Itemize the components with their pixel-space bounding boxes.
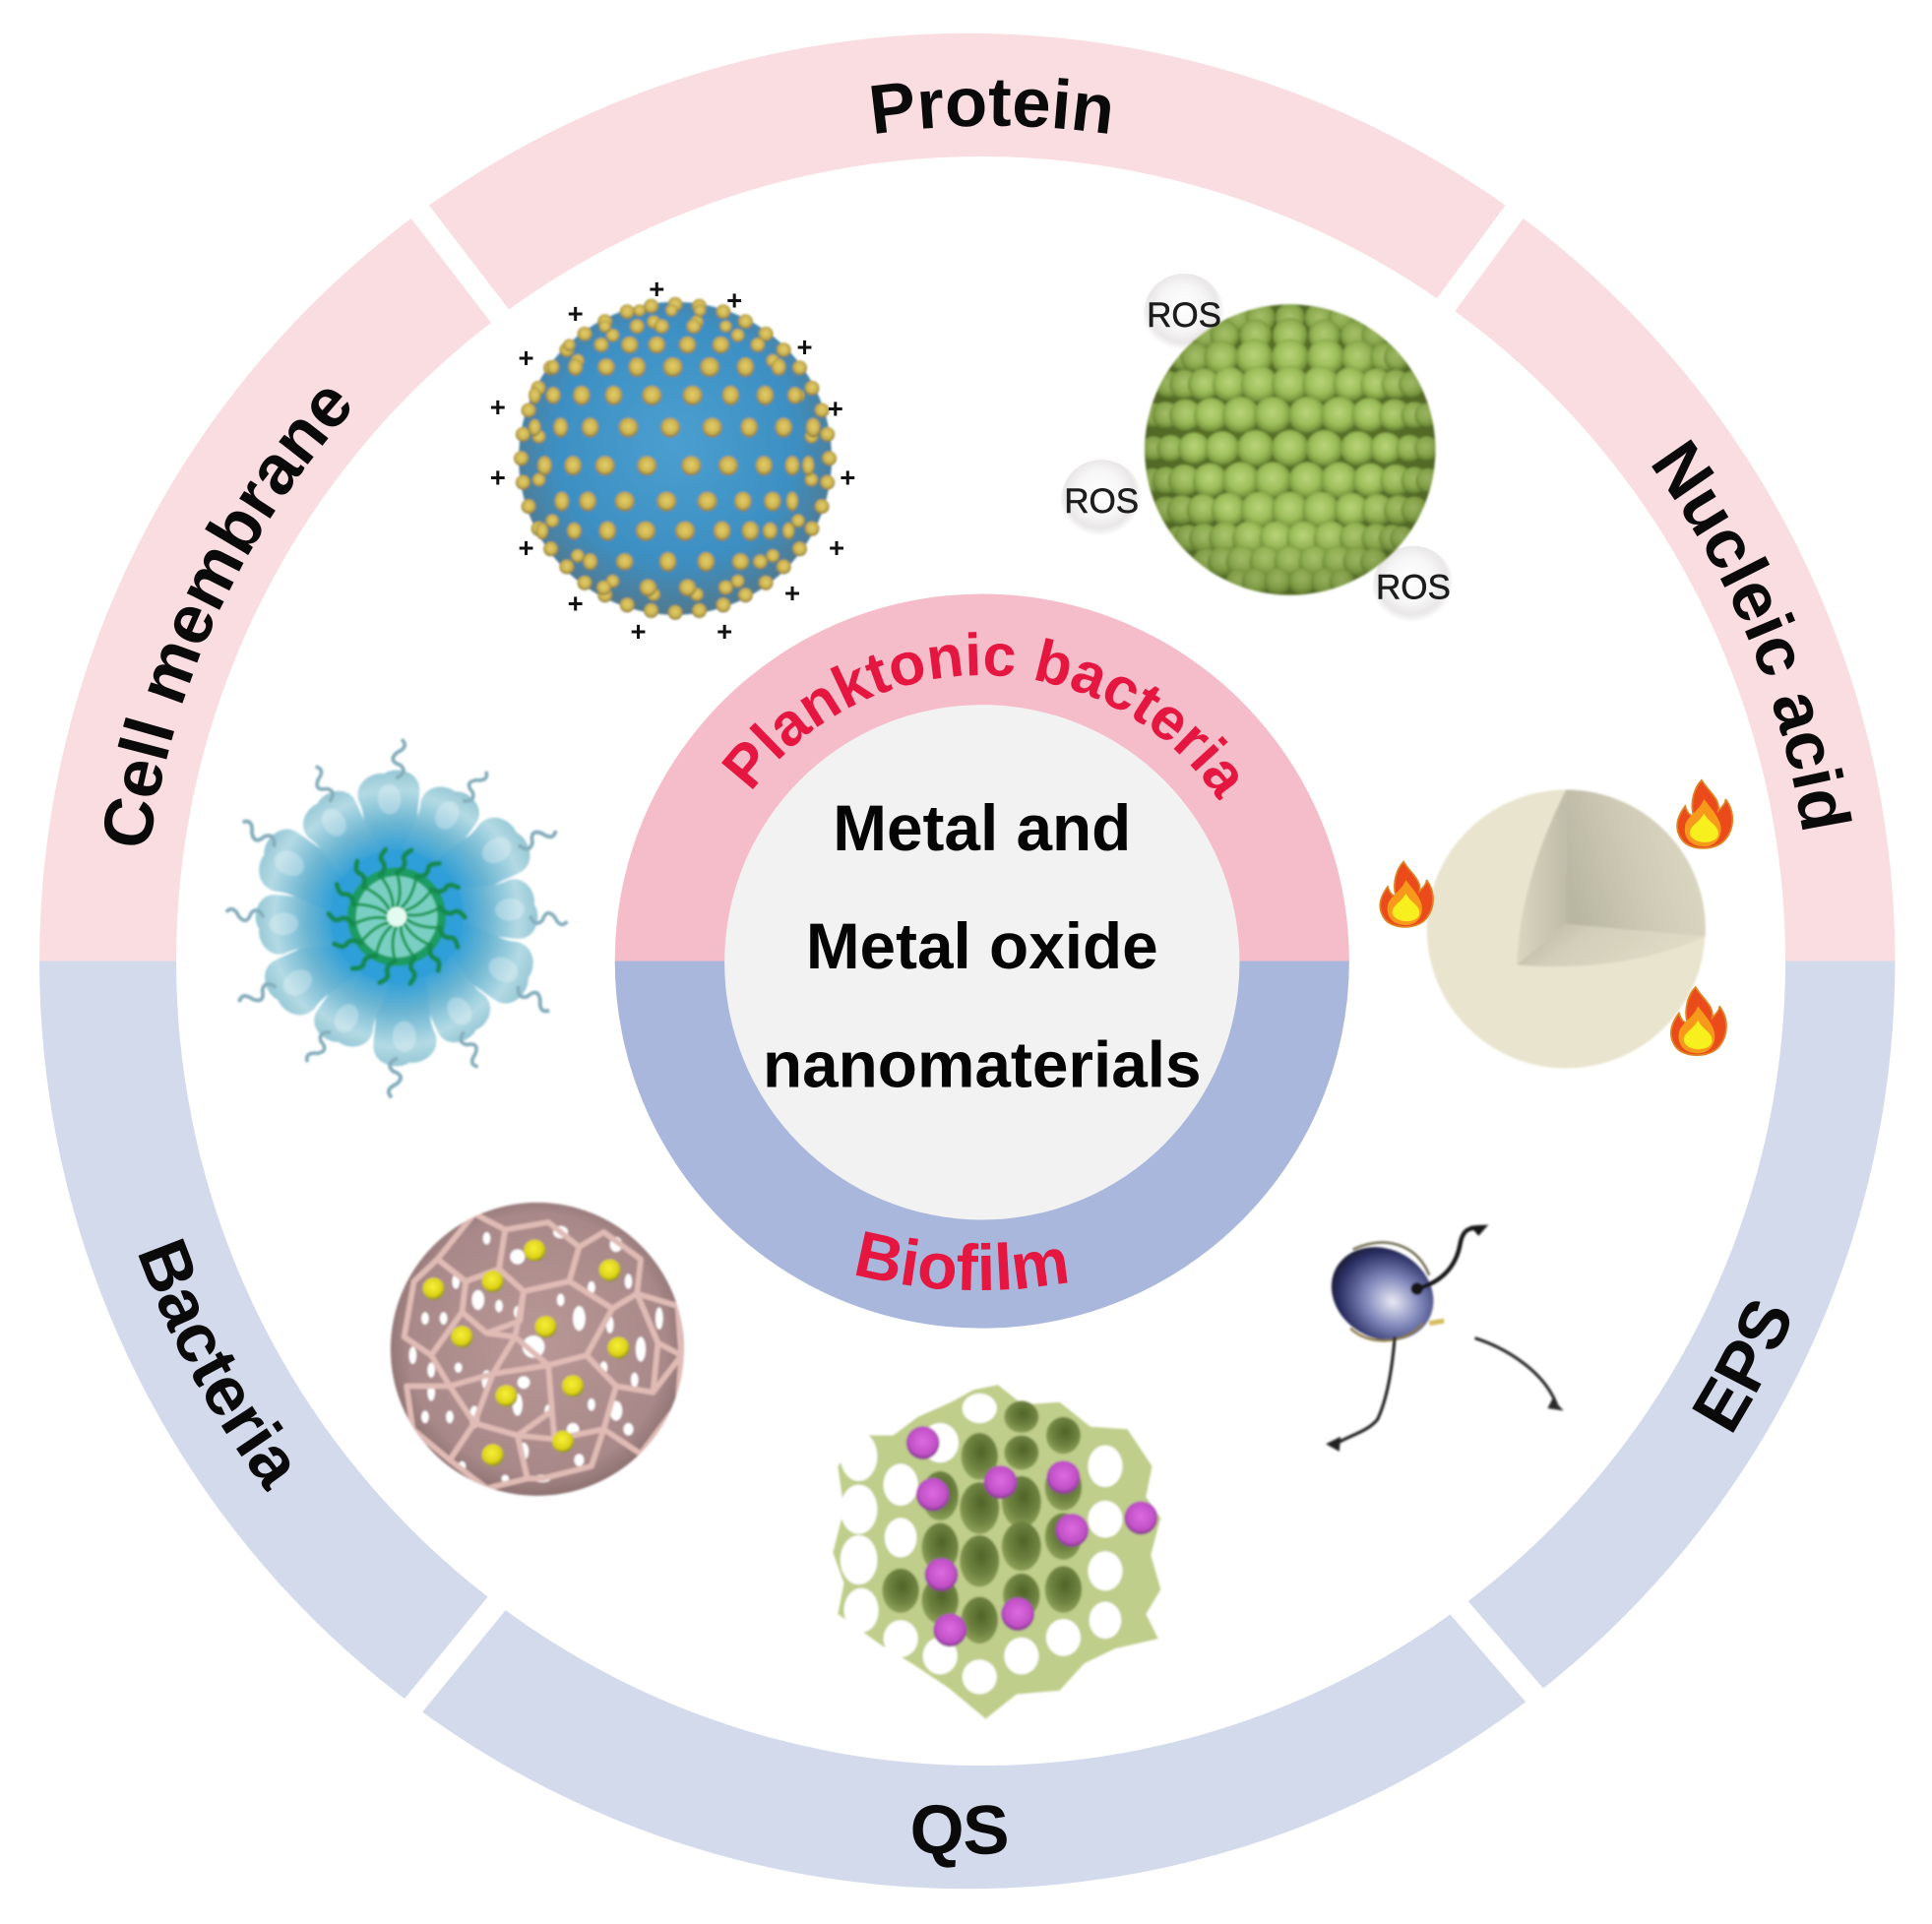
- icon: flame upper right: [1677, 780, 1732, 848]
- icon: blue sphere with gold dots: [514, 297, 837, 620]
- icon: cream hollow core-shell sphere: [1427, 790, 1706, 1068]
- icon: plus charges around blue sphere: +: [796, 332, 813, 362]
- label: Cell membrane: Cell membrane: [104, 390, 350, 845]
- icon: plus charges around blue sphere: +: [784, 578, 800, 608]
- icon: flame left: [1380, 862, 1433, 927]
- label: ROS left: ROS: [1064, 482, 1139, 521]
- icon: ROS bubble halos: [1061, 274, 1454, 627]
- centre title: nanomaterials: [763, 1028, 1202, 1100]
- label: EPS: EPS: [1692, 1301, 1789, 1433]
- label: Nucleic acid: Nucleic acid: [1652, 439, 1852, 831]
- label: Protein: Protein: [871, 78, 1110, 134]
- hub label: Biofilm: Biofilm: [856, 1231, 1067, 1290]
- icon: plus charges around blue sphere: +: [726, 284, 742, 315]
- icon: green nanoparticle cluster: [1140, 303, 1440, 595]
- icon: flame lower right: [1671, 987, 1726, 1055]
- icon: plus charges around blue sphere: +: [568, 588, 584, 618]
- hub label: Planktonic bacteria: Planktonic bacteria: [721, 632, 1238, 801]
- central hub ring: [615, 593, 1349, 1329]
- label: ROS bottom right: ROS: [1376, 568, 1451, 606]
- icon: micelle with blue petals: [221, 738, 571, 1098]
- centre title: Metal oxide: [806, 910, 1158, 982]
- icon: plus charges around blue sphere: +: [490, 463, 506, 493]
- label: Bacteria: Bacteria: [138, 1238, 289, 1492]
- icon: plus charges around blue sphere: +: [630, 616, 647, 647]
- icon: plus charges around blue sphere: +: [568, 298, 584, 329]
- icon: plus charges around blue sphere: [490, 274, 855, 647]
- icon: plus charges around blue sphere: +: [519, 342, 534, 373]
- label: QS: QS: [913, 1805, 1007, 1868]
- icon: pink fullerene cage with yellow balls: [391, 1203, 684, 1496]
- label: ROS top: ROS: [1147, 296, 1221, 335]
- icon: green porous lattice with purple balls: [833, 1385, 1160, 1718]
- icon: plus charges around blue sphere: +: [840, 463, 855, 493]
- centre title: [763, 792, 1202, 1100]
- icon: plus charges around blue sphere: +: [519, 532, 534, 563]
- icon: plus charges around blue sphere: +: [828, 393, 843, 423]
- icon: plus charges around blue sphere: +: [829, 532, 844, 563]
- icon: plus charges around blue sphere: +: [649, 274, 664, 304]
- centre title: Metal and: [833, 792, 1131, 864]
- icon: plus charges around blue sphere: +: [490, 392, 506, 422]
- icon: plus charges around blue sphere: +: [717, 616, 732, 647]
- icon: bacterium-like motor with flagella: [1314, 1224, 1564, 1452]
